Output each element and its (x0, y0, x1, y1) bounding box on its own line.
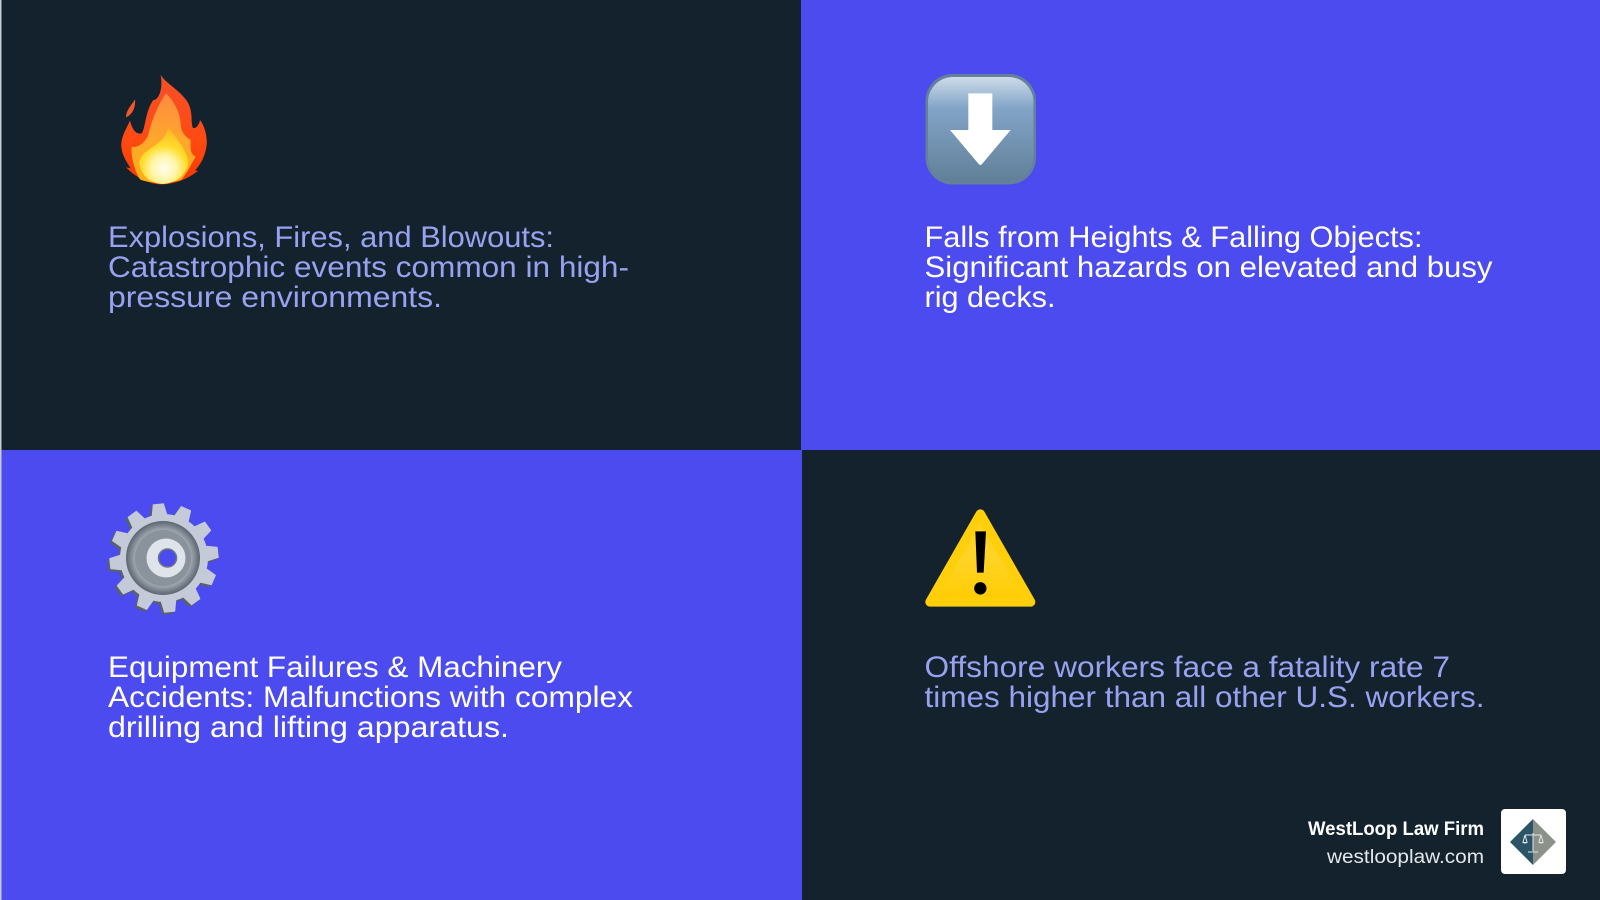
text: fatality: Offshore workers face a fatality rate 7 (924, 651, 1450, 684)
text: falls (924, 221, 1492, 314)
firm name: WestLoop Law Firm (1308, 819, 1484, 840)
panel: explosions, fires and blowouts (0, 0, 801, 450)
text: equipment: Equipment Failures & Machinery (108, 651, 562, 684)
icon: warning triangle (930, 514, 1031, 602)
text: falls: Significant hazards on elevated and busy (924, 251, 1492, 284)
firm website: westlooplaw.com (1326, 847, 1484, 868)
text: explosions: Explosions, Fires, and Blowouts: (108, 221, 554, 254)
panel: falls from heights (801, 0, 1600, 450)
icon: down arrow (926, 74, 1036, 184)
text: equipment: drilling and lifting apparatus. (108, 711, 509, 744)
icon: gear (107, 503, 219, 615)
panel: fatality rate (802, 450, 1600, 900)
panel: equipment failures (0, 450, 802, 900)
logo (1501, 809, 1566, 874)
text: explosions (108, 221, 629, 314)
text: falls: rig decks. (924, 281, 1056, 314)
text: fatality: times higher than all other U.S. workers. (924, 681, 1484, 714)
icon: fire (121, 74, 207, 184)
text: explosions: Catastrophic events common in high- (108, 251, 629, 284)
text: explosions: pressure environments. (108, 281, 442, 314)
text: falls: Falls from Heights & Falling Objects: (924, 221, 1422, 254)
text: fatality (924, 651, 1484, 714)
text: equipment (108, 651, 633, 744)
branding (1308, 809, 1566, 874)
text: equipment: Accidents: Malfunctions with complex (108, 681, 633, 714)
